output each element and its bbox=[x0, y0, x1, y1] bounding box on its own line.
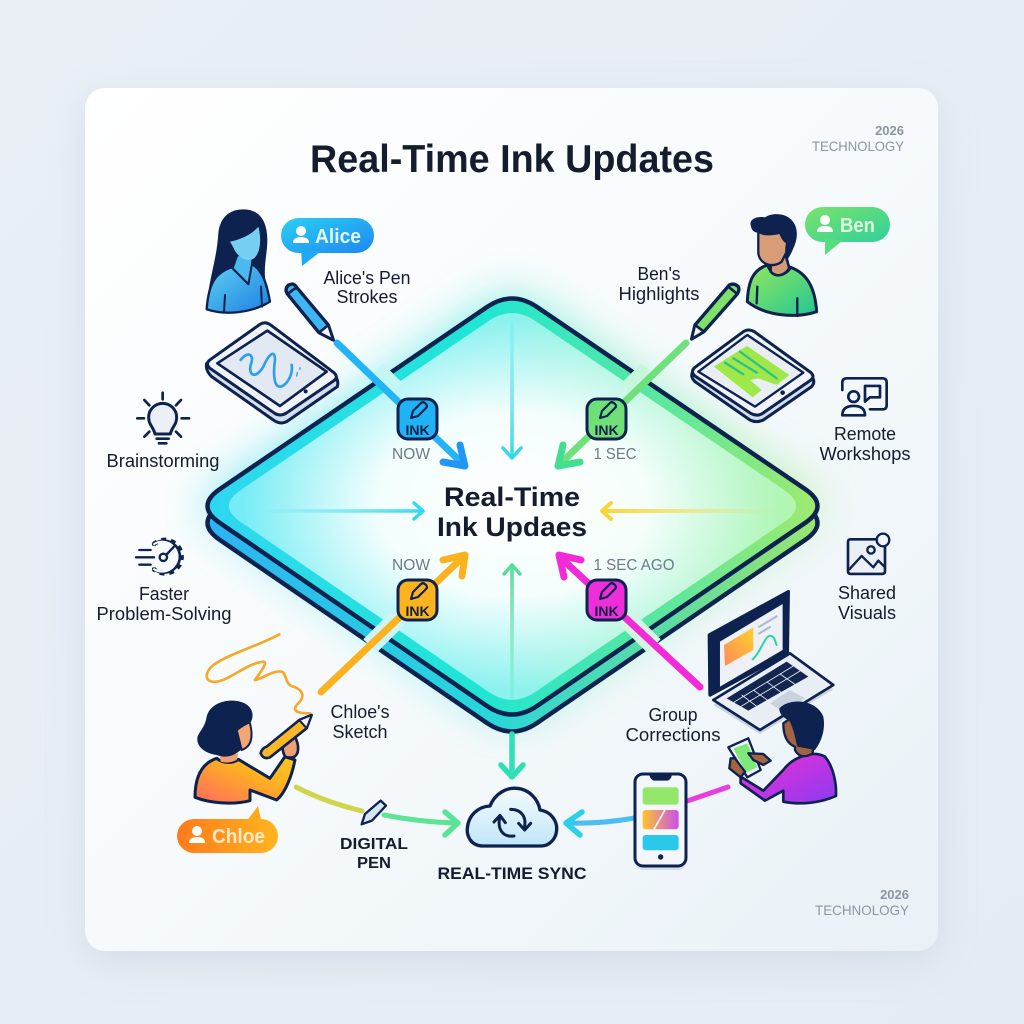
arrow: Ben ink bbox=[558, 343, 686, 466]
title: Real-Time Ink Updates bbox=[310, 138, 714, 181]
icon: Ben tablet bbox=[692, 330, 814, 422]
arrow: phone to cloud bbox=[566, 787, 728, 835]
panel: Alice bbox=[206, 209, 410, 423]
panel: group corrections person bbox=[728, 702, 836, 803]
label: Ben's highlights: Highlights bbox=[618, 284, 700, 304]
label: group corrections: Corrections bbox=[626, 725, 720, 745]
arrow: tablet to cloud bbox=[501, 734, 523, 777]
icon: Alice tablet bbox=[206, 323, 338, 423]
center text bbox=[437, 482, 587, 542]
inner arrow: bottom bbox=[504, 565, 520, 705]
main card bbox=[85, 88, 938, 951]
inner arrow: right bbox=[602, 503, 780, 519]
icon: fast gear bbox=[136, 540, 182, 573]
badge: magenta ink: INK bbox=[594, 603, 619, 619]
icon: Chloe bubble bbox=[177, 806, 278, 853]
label: shared visuals bbox=[838, 583, 896, 623]
icon: phone bbox=[635, 774, 686, 870]
arrow: Chloe ink bbox=[321, 555, 465, 692]
icon: remote workshop bbox=[842, 378, 887, 415]
label: brainstorming: Brainstorming bbox=[106, 451, 220, 471]
icon: Chloe avatar bbox=[195, 701, 312, 803]
badge: magenta ink bbox=[587, 580, 626, 620]
icon: shared visuals bbox=[848, 534, 889, 574]
badge: green ink bbox=[587, 399, 626, 439]
label: faster problem-solving: Problem-Solving bbox=[96, 604, 232, 624]
badge: orange ink: INK bbox=[405, 603, 430, 619]
bottom-right tag: TECHNOLOGY bbox=[815, 902, 910, 918]
arrow: Alice ink bbox=[337, 343, 465, 466]
label: Ben's highlights: Ben's bbox=[638, 264, 680, 284]
arrow: digital pen to cloud bbox=[296, 787, 458, 835]
icon: Chloe bubble: Chloe bbox=[212, 826, 265, 848]
label: shared visuals: Shared bbox=[838, 583, 896, 603]
icon: laptop bbox=[709, 592, 833, 734]
label: Ben's highlights bbox=[618, 264, 700, 304]
inner arrow: left bbox=[260, 503, 423, 519]
label: digital pen bbox=[340, 836, 408, 872]
icon: blue pen bbox=[286, 284, 333, 340]
label: faster problem-solving: Faster bbox=[139, 584, 189, 604]
icon: lightbulb bbox=[137, 393, 189, 443]
panel: Chloe bbox=[177, 634, 390, 853]
label: shared visuals: Visuals bbox=[838, 603, 896, 623]
central diamond tablet bbox=[208, 298, 818, 732]
label: 1 sec: 1 SEC bbox=[594, 446, 636, 463]
label: 1 sec ago: 1 SEC AGO bbox=[594, 557, 674, 574]
label: group corrections: Group bbox=[648, 705, 698, 725]
badge: blue ink bbox=[398, 399, 437, 439]
label: Chloe's sketch: Sketch bbox=[332, 722, 388, 742]
icon: green pen bbox=[692, 284, 739, 339]
icon: Ben bubble bbox=[805, 207, 890, 255]
label: digital pen: DIGITAL bbox=[340, 836, 408, 853]
inner arrow: top bbox=[503, 325, 521, 458]
label: remote workshops: Remote bbox=[834, 424, 896, 444]
arrow: group ink bbox=[559, 555, 700, 687]
infographic canvas bbox=[76, 88, 951, 975]
icon: sync cloud bbox=[467, 788, 557, 846]
top-right tag: TECHNOLOGY bbox=[812, 138, 905, 154]
label: Alice's pen strokes: Alice's Pen bbox=[324, 268, 410, 288]
label: remote workshops bbox=[820, 424, 910, 464]
label: group corrections bbox=[626, 705, 720, 745]
label: Alice's pen strokes bbox=[324, 268, 410, 307]
card shadow bbox=[85, 100, 938, 962]
center text: Ink Updaes bbox=[437, 512, 587, 542]
label: now lower: NOW bbox=[392, 557, 430, 574]
label: faster problem-solving bbox=[96, 584, 232, 624]
icon: Alice bubble: Alice bbox=[315, 226, 361, 248]
badge: blue ink: INK bbox=[405, 422, 430, 438]
label: now: NOW bbox=[392, 446, 430, 463]
label: digital pen: PEN bbox=[357, 855, 391, 872]
icon: sketch squiggle bbox=[207, 634, 310, 713]
center text: Real-Time bbox=[444, 482, 580, 512]
bottom-right tag: 2026 bbox=[880, 887, 909, 902]
label: Chloe's sketch bbox=[330, 702, 390, 742]
gaps where arrows cross the tablet edge bbox=[370, 370, 654, 646]
icon: Ben avatar bbox=[747, 214, 817, 316]
badge: orange ink bbox=[398, 580, 437, 620]
icon: Alice avatar bbox=[206, 209, 271, 313]
icon: Alice bubble bbox=[281, 218, 374, 266]
top-right tag bbox=[812, 123, 905, 154]
panel: Ben bbox=[618, 207, 890, 422]
icon: Ben bubble: Ben bbox=[840, 215, 875, 237]
icon: digital pen bbox=[362, 801, 386, 824]
badge: green ink: INK bbox=[594, 422, 619, 438]
bottom-right tag bbox=[815, 887, 910, 918]
label: Alice's pen strokes: Strokes bbox=[336, 287, 398, 307]
label: real-time sync: REAL-TIME SYNC bbox=[438, 865, 587, 883]
label: remote workshops: Workshops bbox=[820, 444, 910, 464]
top-right tag: 2026 bbox=[875, 123, 904, 138]
label: Chloe's sketch: Chloe's bbox=[330, 702, 390, 722]
